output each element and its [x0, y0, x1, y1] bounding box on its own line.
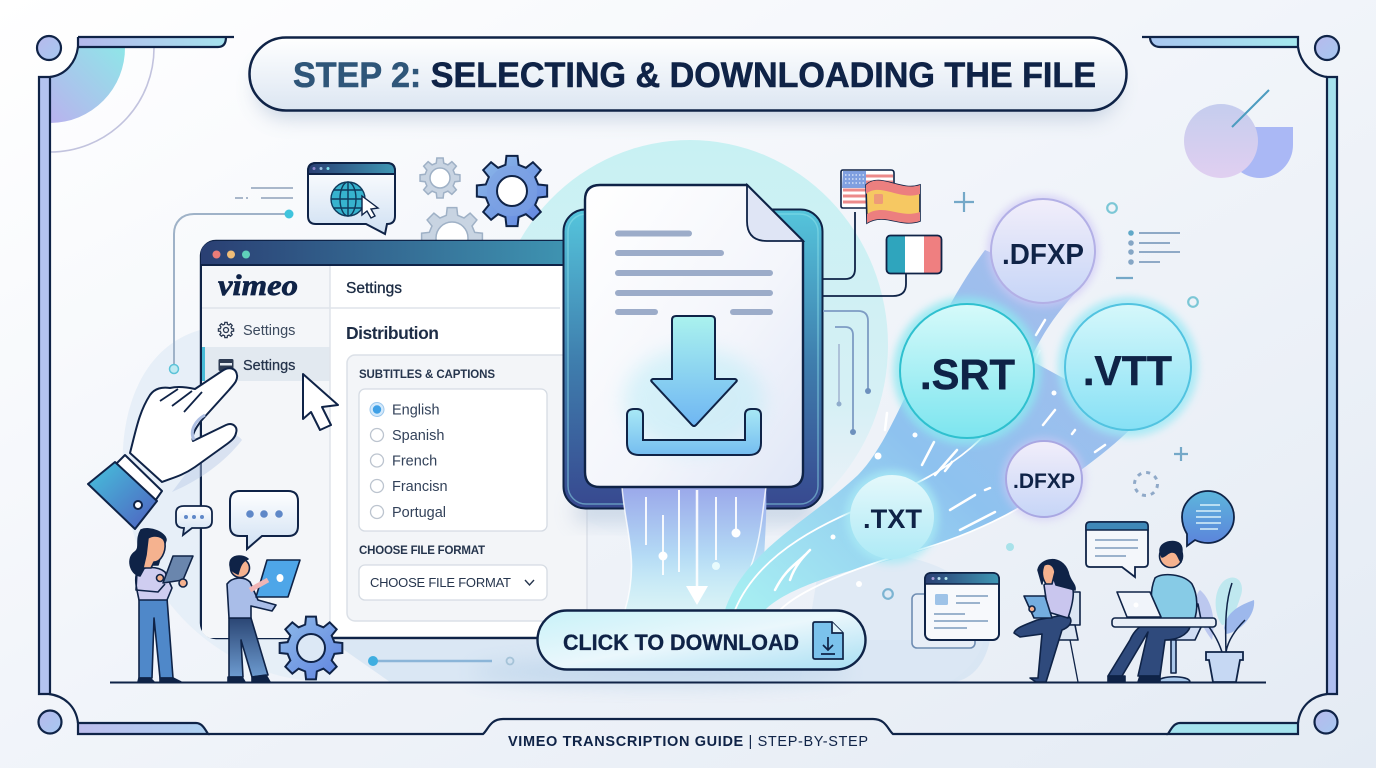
chat icon bubble	[1182, 491, 1234, 546]
ground line	[110, 682, 1266, 684]
format bubble: .VTT	[1058, 297, 1198, 437]
speech bubble: small	[176, 506, 212, 535]
icon: Spanish flag	[866, 180, 920, 223]
accent dot	[1006, 543, 1014, 551]
desk top	[1112, 618, 1216, 627]
heading: distribution: Distribution	[346, 323, 439, 343]
label: choose file format: CHOOSE FILE FORMAT	[359, 545, 485, 557]
footer text: VIMEO TRANSCRIPTION GUIDE | STEP-BY-STEP	[508, 734, 868, 750]
format bubble: .SRT: .SRT	[920, 351, 1015, 399]
title pill	[250, 38, 1126, 118]
format bubble: .TXT: .TXT	[863, 504, 923, 534]
language list: French	[392, 454, 437, 470]
format bubble: .DFXP large: .DFXP	[1002, 239, 1084, 271]
sidebar icon: gear	[218, 322, 234, 338]
format bubble: .SRT	[893, 297, 1041, 445]
person: man with tablet	[227, 556, 300, 682]
floating accents	[883, 192, 1198, 599]
document text lines	[618, 234, 770, 312]
language list: Francisn	[392, 479, 448, 495]
header: settings: Settings	[346, 280, 402, 297]
teal-blue panel behind document	[564, 210, 822, 508]
circuit lines and flag connectors	[823, 212, 906, 435]
decorative quarter circles top left	[50, 47, 154, 152]
settings card	[347, 355, 587, 621]
format bubble: .VTT: .VTT	[1083, 347, 1172, 394]
flow below document	[622, 487, 766, 610]
language list	[359, 389, 547, 531]
icon: Italian flag	[886, 236, 942, 274]
speech bubble: text window	[1086, 522, 1148, 577]
gear bottom	[280, 617, 342, 679]
decorative shapes top right	[1184, 90, 1293, 178]
icon: globe browser bubble	[308, 163, 395, 234]
panel shadow	[575, 500, 815, 522]
dropdown: CHOOSE FILE FORMAT	[370, 575, 511, 590]
click to download button: CLICK TO DOWNLOAD	[563, 630, 799, 655]
plant	[1196, 578, 1254, 682]
format bubble: .TXT	[845, 470, 939, 564]
sidebar	[202, 265, 560, 638]
format bubble: .DFXP large	[987, 195, 1099, 307]
icon: download arrow	[651, 316, 737, 426]
title text: STEP 2: SELECTING & DOWNLOADING THE FILE	[293, 55, 1096, 95]
icon: download file	[813, 622, 843, 659]
label: subtitles and captions: SUBTITLES & CAPTIONS	[359, 369, 495, 381]
speech bubble: large	[230, 491, 298, 549]
sidebar item: settings: Settings	[243, 323, 295, 339]
browser window icon right	[912, 573, 999, 648]
icon: US flag	[841, 170, 894, 208]
format bubble: .DFXP small: .DFXP	[1013, 470, 1075, 493]
plant pot	[1206, 652, 1243, 682]
document	[585, 185, 803, 487]
gears behind window	[419, 154, 548, 240]
hand pointer	[88, 368, 242, 529]
window title bar	[201, 241, 581, 265]
fold	[747, 185, 803, 241]
data ribbon to file formats	[725, 250, 1140, 610]
person: seated woman with tablet	[1014, 560, 1080, 682]
cursor arrow	[303, 374, 338, 430]
dropdown	[359, 565, 547, 600]
vimeo logo: vimeo	[218, 269, 298, 302]
click to download button	[538, 610, 866, 670]
language list: Spanish	[392, 428, 444, 444]
language list: Portugal	[392, 505, 446, 521]
connector line with dots	[170, 188, 294, 374]
slider	[368, 656, 514, 666]
background blobs	[123, 330, 990, 686]
list icon	[1128, 230, 1180, 265]
language list: English	[392, 402, 440, 418]
format bubble: .DFXP small	[1002, 437, 1086, 521]
sidebar item: selected settings: Settings	[243, 358, 295, 374]
browser window	[201, 241, 587, 638]
teal blob behind document	[492, 140, 888, 550]
person: man at desk with laptop	[1108, 542, 1216, 682]
icon: download tray	[627, 409, 761, 455]
sidebar icon: card	[218, 359, 234, 371]
person: woman with tablet	[130, 529, 193, 682]
